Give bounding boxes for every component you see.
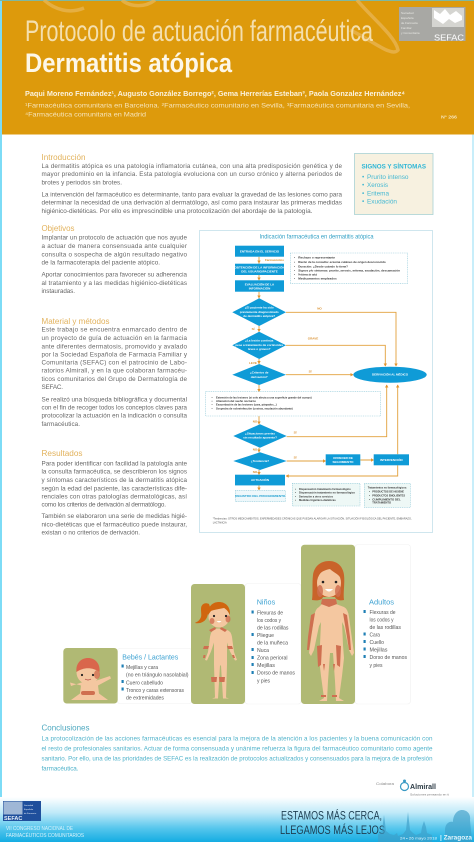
collaborator: Almirall: Soluciones pensando en ti (410, 792, 449, 796)
text: niños: Zona perioral (257, 656, 288, 662)
note: tratamientos: PRODUCTOS DE HIGIENE (372, 489, 404, 493)
poster number: Nº 266 (441, 114, 458, 120)
note: actuaciones: Dispensación tratamiento no farmacológico (299, 491, 355, 495)
flowchart connectors: SÍ (252, 326, 255, 331)
section: Introducción: brotes y periodos sin brotes. (42, 179, 122, 186)
note: datos a recoger: Duración: ¿Desde cuándo lo tiene? (298, 264, 348, 268)
outcome: derivación al médico (353, 367, 427, 383)
icon: adult figure (307, 561, 354, 701)
decision: criterios de derivación (232, 364, 286, 385)
section: Resultados: según la edad del paciente, las características dife- (42, 485, 187, 492)
congress name: FARMACÉUTICOS COMUNITARIOS (6, 832, 84, 839)
text: bebés: de extremidades (126, 696, 164, 702)
panel: signos y síntomas: Eritema (367, 190, 389, 197)
note: actuaciones: Dispensación tratamiento farmacológico (299, 487, 351, 491)
section: Objetivos: instauradas. (42, 288, 75, 295)
text: bebés: Mejillas y cara (126, 665, 159, 671)
step: intervención: INTERVENCIÓN (380, 457, 403, 462)
step: evaluación de la información (235, 280, 284, 292)
step: ofrecer seguimiento (326, 454, 360, 465)
text: adultos: Mejillas (370, 648, 388, 654)
step: registro del procedimiento (235, 490, 286, 502)
collaborator: Almirall: Almirall (410, 784, 436, 791)
collaborator: Almirall (376, 780, 449, 796)
note: criterios (206, 392, 381, 416)
section: Resultados: Para poder identificar con facilidad la patología ante (42, 460, 187, 467)
flowchart connectors: Farmacéutico (265, 258, 284, 262)
flowchart connectors: NO (253, 448, 258, 452)
note: actuaciones: • (295, 487, 296, 491)
note: actuaciones: Medidas higiénico-dietéticas (299, 498, 336, 502)
slogan: ESTAMOS MÁS CERCA, (281, 810, 382, 822)
decision: tendencia (233, 452, 287, 470)
note: actuaciones: • (295, 491, 296, 495)
section: Resultados: existan o no criterios de derivación. (42, 530, 140, 537)
section: Material y métodos (42, 316, 188, 428)
step: intervención (374, 454, 409, 465)
step: ofrecer seguimiento: OFRECER DE (333, 456, 353, 460)
section: Resultados: Resultados (42, 448, 82, 458)
text: niños: y pies (257, 678, 270, 684)
note: datos a recoger: • (294, 277, 295, 281)
section: Material y métodos: ticos comunitarios del Grupo de Dermatología de (42, 376, 187, 383)
logo: SEFAC (399, 7, 466, 42)
section: Material y métodos: ratorios Almirall, y en la que colaboran farmacéu- (42, 368, 187, 375)
flowchart connectors: SÍ (309, 368, 312, 374)
note: criterios: Exacerbación de las lesiones (cara, párpados...) (216, 403, 277, 407)
section: Introducción: higiénico-dietéticas. Por ello es imprescindible una protocolización del abordaje de la patología. (42, 208, 313, 215)
note: datos a recoger: Razón de la consulta: eczema cutáneo de origen desconocido (298, 260, 386, 264)
section: Introducción (42, 152, 342, 215)
text: bebés: Bebés / Lactantes (122, 652, 178, 662)
section: Conclusiones: Conclusiones (42, 724, 90, 732)
decision: previamente diagnosticado (232, 298, 286, 326)
step: obtención de la información: OBTENCIÓN DE LA INFORMACIÓN (234, 265, 285, 270)
text: niños: Flexuras de (257, 610, 283, 616)
note: datos a recoger: Signos y/o síntomas: prurito, xerosis, eritema, exudación, descamación (298, 269, 400, 273)
decision: lesión con corticoides: ¿La lesión continúa (245, 338, 274, 342)
section: Resultados (42, 448, 187, 537)
section: Material y métodos: SEFAC. (42, 384, 63, 391)
text: niños: de las rodillas (257, 626, 289, 632)
decision: criterios de derivación: ¿Criterios de (250, 370, 269, 374)
header banner (0, 0, 474, 134)
text: adultos: Flexuras de (370, 610, 396, 616)
text: adultos: Cara (370, 632, 381, 638)
text: niños: Niños (257, 598, 275, 607)
flowchart connectors: GRAVE (308, 336, 318, 340)
note: criterios: • (212, 403, 213, 407)
note: datos a recoger: • (294, 273, 295, 277)
text: niños (252, 598, 295, 684)
panel: signos y síntomas: • (362, 190, 365, 197)
decision: previamente diagnosticado: de dermatitis atópica? (243, 314, 275, 318)
flowchart connectors: NO (317, 306, 322, 310)
flowchart connectors: NO (253, 420, 258, 424)
section: Objetivos: Aportar conocimientos para favorecer su adherencia (42, 272, 187, 278)
section: Introducción: mayor predominio en la infancia. Esta patología evoluciona con un curso crónico y alterna periodos de (42, 171, 342, 178)
note: datos a recoger: • (294, 269, 295, 273)
logo: SEFAC: Española (401, 16, 414, 20)
section: Resultados: También se elaboraron una serie de medidas higié- (42, 513, 187, 520)
note: criterios: Sospecha de sobreinfección (costras, exudación abundante) (216, 407, 293, 411)
flowchart footnote: LACTANCIA (213, 520, 227, 524)
text: bebés: Cuero cabelludo (126, 680, 163, 686)
decision: situaciones previas: sin resultado aparente? (243, 436, 277, 440)
congress name (6, 826, 84, 839)
text: adultos: de las rodillas (370, 625, 401, 631)
text: adultos: los codos y (370, 618, 394, 624)
section: Material y métodos: un proyecto de guía de actuación en la farmacia (42, 335, 187, 342)
step: actuación: ACTUACIÓN (251, 477, 269, 482)
decision: criterios de derivación: derivación? (251, 375, 268, 379)
section: Resultados: renciales con otras patologías dermatológicas, así (42, 494, 187, 501)
flowchart footnote (213, 516, 412, 524)
decision: lesión con corticoides (232, 332, 286, 359)
flowchart connectors (249, 257, 399, 490)
panel: signos y síntomas: • (362, 198, 365, 205)
icon: baby figure (70, 658, 111, 700)
note: tratamientos: PRODUCTOS EMOLIENTES (372, 493, 405, 497)
section: Material y métodos: farmacéutica. (42, 421, 80, 428)
note: criterios: • (212, 399, 213, 403)
outcome: derivación al médico: DERIVACIÓN AL MÉDICO (372, 372, 409, 377)
step: obtención de la información: DEL USUARIO/PACIENTE (241, 270, 278, 274)
flowchart title: Indicación farmacéutica en dermatitis atópica (260, 234, 374, 240)
decision: previamente diagnosticado: previamente diagnosticado (240, 310, 279, 314)
logo: SEFAC footer: SEFAC (4, 816, 22, 822)
panel: bebés y lactantes (63, 648, 192, 704)
logo: SEFAC footer (3, 801, 41, 822)
section: Material y métodos: por la Sociedad Española de Farmacia Familiar y (42, 352, 188, 359)
date and place: 24 • 26 mayo 2018 (400, 836, 437, 840)
text: niños: los codos y (257, 618, 281, 624)
note: actuaciones: • (295, 498, 296, 502)
step: ofrecer seguimiento: SEGUIMIENTO (333, 460, 354, 464)
note: tratamientos: • (369, 497, 370, 501)
decision: lesión con corticoides: pese a tratamiento de corticoides (235, 343, 283, 347)
decision: tendencia: ¿Tendencia? (251, 459, 269, 463)
section: Resultados: y síntomas característicos de la dermatitis atópica (42, 477, 187, 484)
section: Conclusiones: sanitario. Por ello, una de las prioridades de SEFAC es la realización de protocolos actualizados y consensuados para la mejora de la profesión (42, 756, 433, 762)
flowchart connectors: LEVE (249, 361, 257, 365)
decision: previamente diagnosticado: ¿El paciente ha sido (245, 306, 274, 310)
note: datos a recoger: • (294, 260, 295, 264)
icon: Zaragoza skyline (378, 810, 472, 842)
step: actuación (235, 475, 285, 485)
decision: situaciones previas (233, 424, 287, 448)
note: actuaciones (292, 483, 360, 506)
text: adultos: y pies (370, 663, 383, 669)
text: bebés (122, 652, 189, 702)
authors and affiliations: ¹Farmacéutica comunitaria en Barcelona. ²Farmacéutico comunitario en Sevilla, ³Farmacéutica comunitaria en Sevilla, (25, 103, 410, 110)
section: Introducción: La dermatitis atópica es una patología inflamatoria cutánea, con una alta predisposición genética y de (42, 163, 342, 170)
flowchart connectors: SÍ (294, 430, 297, 434)
text: niños: Pliegue (257, 633, 274, 639)
section: Resultados: nico-dietéticas que el farmacéutico puede instaurar, (42, 521, 187, 528)
collaborator: Almirall: Colabora (376, 782, 395, 786)
authors and affiliations (25, 91, 410, 119)
section: Objetivos: Objetivos (42, 223, 74, 233)
panel: flowchart (200, 230, 432, 532)
text: bebés: Tronco y caras extensoras (126, 688, 184, 694)
date and place: | Zaragoza (440, 836, 473, 842)
section: Material y métodos: Comunitaria (SEFAC) con el patrocinio de Labo- (42, 360, 187, 367)
panel: signos y síntomas (354, 154, 433, 214)
step: evaluación de la información: EVALUACIÓN DE LA (245, 281, 275, 286)
note: actuaciones: Derivación a otros servicios (299, 494, 333, 498)
panel: signos y síntomas: Exudación (367, 198, 397, 205)
section: Material y métodos: protocolizar la actuación en la indicación o consulta (42, 413, 187, 420)
step: entrada en el servicio: ENTRADA EN EL SERVICIO (240, 249, 280, 253)
note: criterios: Extensión de las lesiones (si solo afecta a una superficie grande del cuerpo) (216, 395, 312, 399)
note: tratamientos: • (369, 493, 370, 497)
flowchart connectors: NO (253, 470, 258, 474)
text: adultos: Dorso de manos (370, 655, 407, 661)
section: Objetivos: consulta o sospecha de algún resultado negativo (42, 251, 187, 258)
section: Resultados: la consulta farmacéutica, se describieron los signos (42, 468, 187, 475)
section: Conclusiones: farmacéutica. (42, 766, 79, 772)
panel: signos y síntomas: Xerosis (367, 182, 389, 189)
step: registro del procedimiento: REGISTRO DEL PROCEDIMIENTO (235, 494, 286, 498)
section: Introducción: Introducción (42, 152, 86, 162)
section: Material y métodos: con el fin de recoger todos los conceptos claves para (42, 404, 187, 411)
section: Introducción: determinar la necesidad de una derivación al dermatólogo, así como para instaurar las primeras medidas (42, 200, 342, 207)
flowchart footnote: *Tendencias: OTROS MEDICAMENTOS, ENFERMEDADES CRÓNICAS QUE PUEDAN ALARGAR LA SITUACIÓN, SITUACIÓN FISIOLÓGICA DEL PACIENTE, EMBARAZO, (213, 516, 412, 520)
section: Objetivos (42, 223, 187, 295)
decision: lesión con corticoides: leves o graves? (248, 347, 271, 351)
note: datos a recoger: Medicamentos empleados (298, 277, 337, 281)
section: Material y métodos: Material y métodos (42, 316, 110, 326)
section: Material y métodos: Este trabajo se encuentra enmarcado dentro de (42, 327, 187, 334)
panel: signos y síntomas: Prurito intenso (367, 174, 409, 181)
footer banner (0, 797, 474, 842)
note: datos a recoger: • (294, 256, 295, 260)
step: obtención de la información (234, 264, 285, 275)
text: niños: de la muñeca (257, 640, 289, 646)
section: Conclusiones (42, 724, 433, 772)
section: Objetivos: Implantar un protocolo de actuación que nos ayude (42, 234, 187, 242)
note: datos a recoger: • (294, 264, 295, 268)
note: datos a recoger (290, 253, 408, 284)
note: criterios: • (212, 395, 213, 399)
section: Introducción: La intervención del farmacéutico es determinante, tanto para evaluar la gravedad de las lesiones como para (42, 192, 342, 198)
section: Conclusiones: La protocolización de las acciones farmacéuticas es esencial para la mejora de la atención a los pacientes y la buena comunicación con (42, 735, 433, 742)
logo: SEFAC footer: de Farmacia (24, 812, 37, 815)
note: tratamientos: • (369, 489, 370, 493)
note: tratamientos: Tratamientos no farmacológicos: (368, 486, 407, 490)
flowchart connectors: SÍ (294, 454, 297, 460)
logo: SEFAC: Sociedad (401, 11, 414, 15)
text: adultos (364, 598, 407, 669)
section: Material y métodos: ante diferentes dermatosis, promovido y avalado (42, 343, 187, 350)
panel: signos y síntomas: • (362, 182, 365, 189)
section: Material y métodos: Se realizó una búsqueda bibliográfica y documental (42, 396, 187, 403)
panel: niños (191, 584, 301, 704)
logo: SEFAC footer: Española (24, 808, 34, 811)
text: niños: Dorso de manos (257, 671, 295, 677)
note: criterios: Alteración del sueño nocturno (216, 399, 256, 403)
logo: SEFAC: Familiar (401, 26, 412, 30)
congress name: VII CONGRESO NACIONAL DE (6, 826, 73, 832)
section: Objetivos: de la farmacoterapia del paciente atópico. (42, 260, 160, 267)
slogan (280, 810, 385, 837)
note: tratamientos: TRATAMIENTO (372, 501, 392, 505)
decision: situaciones previas: ¿Situaciones previas (245, 432, 275, 436)
section: Resultados: como los criterios de derivación al dermatólogo. (42, 501, 166, 508)
logo: SEFAC: de Farmacia (401, 21, 418, 25)
panel: signos y síntomas: • (362, 174, 365, 181)
note: actuaciones: • (295, 494, 296, 498)
section: Conclusiones: el resto de profesionales sanitarios. Actuar de forma consensuada y unánime refuerza la figura del farmacéutico comunitario como agente (42, 745, 433, 752)
text: adultos: Adultos (369, 598, 394, 606)
logo: SEFAC: SEFAC (434, 34, 464, 42)
logo: SEFAC: y Comunitaria (401, 31, 420, 35)
slogan: LLEGAMOS MÁS LEJOS (280, 824, 385, 837)
authors and affiliations: Paqui Moreno Fernández¹, Augusto González Borrego², Gema Herrerías Esteban³, Paola Gonzalez Hernández⁴ (25, 91, 406, 98)
text: bebés: (no en triángulo nasolabial) (126, 672, 189, 678)
title: Dermatitis atópica (25, 48, 233, 78)
note: datos a recoger: Rechazo o representante (298, 256, 335, 260)
text: niños: Mejillas (257, 663, 275, 669)
panel: adultos (301, 544, 410, 704)
note: tratamientos (364, 483, 410, 507)
text: niños: Nuca (257, 648, 270, 654)
step: evaluación de la información: INFORMACIÓN (249, 285, 270, 290)
note: datos a recoger: Problemas de salud (298, 273, 317, 277)
date and place (400, 836, 473, 842)
authors and affiliations: ⁴Farmacéutica comunitaria en Madrid (25, 112, 146, 119)
note: criterios: • (212, 407, 213, 411)
section: Objetivos: al tratamiento y a las medidas higiénico-dietéticas (42, 280, 187, 287)
step: entrada en el servicio (235, 246, 284, 257)
text: adultos: Cuello (370, 640, 384, 646)
panel: signos y síntomas: SIGNOS Y SÍNTOMAS (362, 162, 426, 170)
note: tratamientos: CUMPLIMIENTO DEL (372, 497, 401, 501)
logo: SEFAC footer: Sociedad (24, 805, 34, 807)
section: Objetivos: a actuar de manera consensuada ante cualquier (42, 243, 187, 250)
icon: child figure (195, 602, 237, 698)
title (25, 15, 373, 78)
